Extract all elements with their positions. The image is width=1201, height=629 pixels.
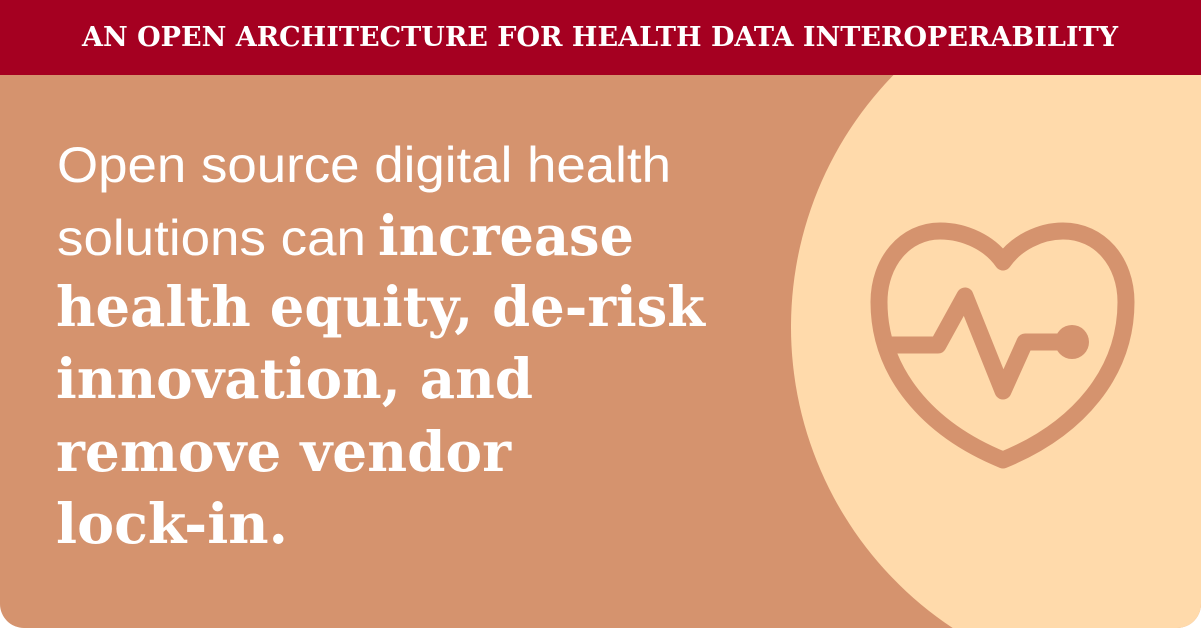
line 2 bold: increase bbox=[378, 203, 634, 268]
pulse line bbox=[888, 296, 1072, 391]
main statement text bbox=[56, 137, 707, 556]
line 5: remove vendor bbox=[56, 419, 512, 484]
line 4: innovation, and bbox=[56, 346, 533, 411]
line 3: health equity, de-risk bbox=[56, 274, 707, 339]
peach circle bbox=[791, 75, 1201, 628]
pulse end dot bbox=[1055, 325, 1089, 359]
line 6: lock-in. bbox=[56, 491, 288, 556]
line 1: Open source digital health bbox=[57, 137, 671, 193]
heart outline bbox=[879, 231, 1126, 460]
line 2 regular: solutions can bbox=[57, 210, 366, 266]
header banner bbox=[0, 0, 1201, 75]
icon: heart with pulse line bbox=[879, 231, 1126, 460]
header title: AN OPEN ARCHITECTURE FOR HEALTH DATA INTEROPERABILITY bbox=[81, 22, 1119, 53]
